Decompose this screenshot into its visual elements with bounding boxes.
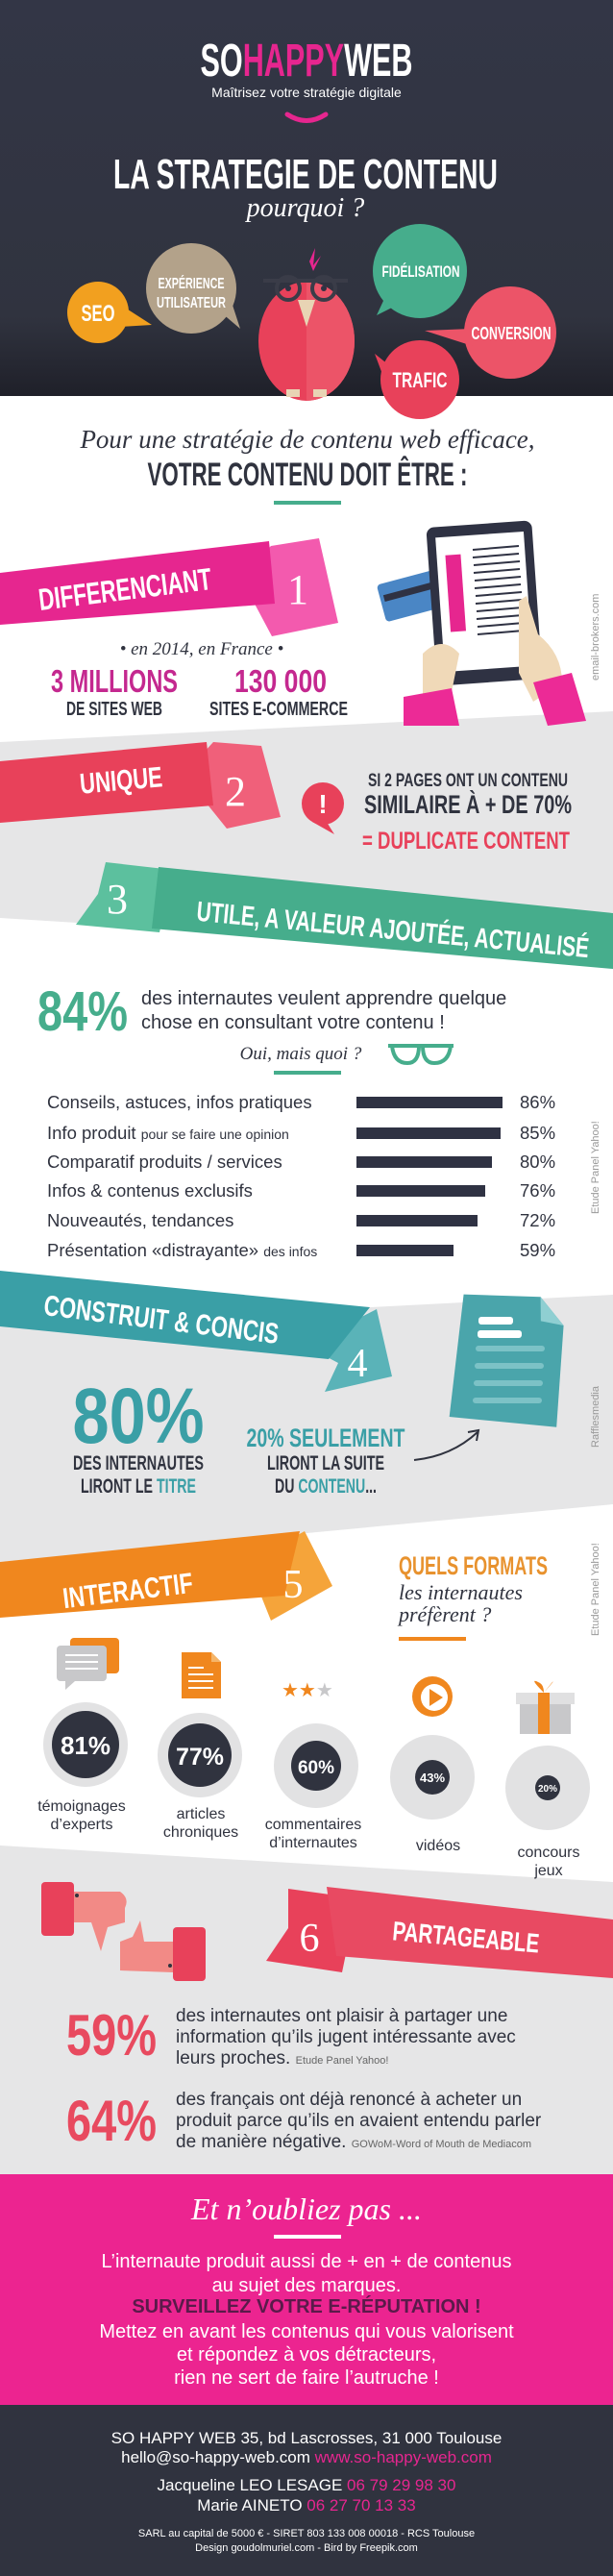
stats: sites web: 3 MILLIONS: [51, 663, 178, 699]
ribbon 1: differenciant: DIFFERENCIANT: [37, 561, 213, 617]
panel: et n'oubliez pas: L’internaute produit aussi de + en + de contenus: [102, 2251, 511, 2272]
bubble: SEO: [67, 282, 152, 343]
title: [113, 151, 498, 223]
chart: format circles: témoignages: [37, 1798, 126, 1815]
bubble: trafic: [375, 340, 459, 419]
footer: SARL au capital de 5000 € - SIRET 803 133 008 00018 - RCS Toulouse: [138, 2528, 475, 2539]
ribbon 1: differenciant: 1: [287, 566, 308, 613]
panel: et n'oubliez pas: Mettez en avant les contenus qui vous valorisent: [99, 2321, 514, 2342]
ribbon 6: partageable: 6: [300, 1917, 319, 1961]
chart: format circles: 60%: [298, 1758, 334, 1778]
bubble: experience utilisateur: EXPÉRIENCE: [158, 274, 225, 292]
bubble: fidelisation: [373, 224, 467, 318]
stat: 59%: [66, 2003, 516, 2068]
stat: 80% titre: DES INTERNAUTES: [73, 1452, 204, 1474]
bar chart: [47, 1092, 555, 1260]
icon: speech bubbles: [57, 1638, 119, 1690]
ribbon 1: differenciant: [0, 538, 338, 636]
bar chart: Info produit pour se faire une opinion: [47, 1123, 289, 1143]
bar chart: 59%: [520, 1240, 555, 1260]
footer: SO HAPPY WEB 35, bd Lascrosses, 31 000 Toulouse: [111, 2429, 502, 2447]
ribbon 2: unique: UNIQUE: [79, 761, 163, 801]
icon: stars: ★★★: [282, 1678, 333, 1701]
stat: 64%: 64%: [66, 2089, 157, 2153]
icon: thumbs: [41, 1882, 206, 1981]
ribbon 5: interactif: INTERACTIF: [61, 1568, 195, 1615]
panel: et n'oubliez pas: et répondez à vos détracteurs,: [177, 2344, 436, 2365]
ribbon 5: interactif: 5: [282, 1563, 304, 1607]
panel: et n'oubliez pas: SURVEILLEZ VOTRE E-RÉPUTATION !: [132, 2295, 481, 2317]
chart: format circles: chroniques: [163, 1824, 238, 1841]
stat: 59%: information qu’ils jugent intéressante avec: [176, 2027, 516, 2047]
subtitle: Pour une stratégie de contenu web efficace,: [79, 425, 535, 454]
chart: format circles: 20%: [538, 1784, 557, 1795]
bubble: trafic: TRAFIC: [392, 368, 448, 392]
callout: duplicate content: [302, 771, 572, 855]
arrow: [414, 1430, 478, 1460]
stat: 64%: de manière négative. GOWoM-Word of Mouth de Mediacom: [176, 2132, 531, 2152]
ribbon 4: construit & concis: CONSTRUIT & CONCIS: [42, 1290, 281, 1350]
stats: sites web: 130 000: [234, 663, 327, 699]
chart: format circles: commentaires: [265, 1817, 361, 1833]
bubble: conversion: CONVERSION: [471, 324, 552, 343]
stats: sites web: [51, 639, 348, 720]
stat: 20% contenu: DU CONTENU...: [275, 1475, 377, 1498]
bubble: experience utilisateur: [146, 243, 240, 334]
bar chart: Présentation «distrayante» des infos: [47, 1240, 317, 1260]
heading: quels formats: les internautes: [399, 1580, 523, 1604]
footer: Marie AINETO 06 27 70 13 33: [197, 2496, 416, 2514]
panel: et n'oubliez pas: [0, 2174, 613, 2405]
bar chart: Nouveautés, tendances: [47, 1210, 233, 1230]
ribbon 6: partageable: PARTAGEABLE: [391, 1916, 541, 1959]
ribbon 4: construit & concis: [0, 1271, 392, 1392]
bar chart: 72%: [520, 1210, 555, 1230]
bar chart: 85%: [520, 1123, 555, 1143]
heading: oui mais quoi: [240, 1044, 454, 1075]
panel: et n'oubliez pas: Et n’oubliez pas ...: [190, 2192, 422, 2226]
stat: 80% titre: 80%: [73, 1373, 204, 1460]
bar chart: 80%: [520, 1152, 555, 1172]
chart: format circles: 81%: [61, 1731, 110, 1760]
stat: 20% contenu: [246, 1424, 405, 1498]
stat: 64%: des français ont déjà renoncé à acheter un: [176, 2090, 522, 2110]
bubble: conversion: [425, 286, 556, 379]
gray band 1: [0, 711, 613, 956]
stat: 80% titre: LIRONT LE TITRE: [81, 1475, 196, 1498]
source: etude panel yahoo 2: Etude Panel Yahoo!: [590, 1543, 601, 1636]
chart: format circles: vidéos: [416, 1838, 460, 1854]
stats: sites web: DE SITES WEB: [66, 699, 162, 720]
bar chart: 76%: [520, 1180, 555, 1201]
stat: 20% contenu: LIRONT LA SUITE: [267, 1452, 384, 1474]
source: rafflesmedia: Rafflesmedia: [590, 1385, 601, 1448]
bubble: experience utilisateur: UTILISATEUR: [157, 295, 226, 311]
bubble: SEO: SEO: [81, 301, 115, 327]
panel: et n'oubliez pas: au sujet des marques.: [212, 2275, 401, 2296]
stats: sites web: SITES E-COMMERCE: [209, 699, 348, 720]
logo: Maîtrisez votre stratégie digitale: [211, 85, 402, 100]
ribbon 2: unique: [0, 742, 281, 829]
stat: 80% titre: [73, 1373, 204, 1498]
chart: format circles: d’experts: [51, 1817, 112, 1833]
icon: play: [412, 1676, 453, 1717]
ribbon 2: unique: 2: [225, 768, 246, 815]
chart: format circles: [37, 1702, 590, 1879]
gray band 3: [0, 1845, 613, 2174]
stat: 84%: [37, 980, 506, 1043]
stat: 59%: des internautes ont plaisir à partager une: [176, 2006, 507, 2026]
stat: 64%: produit parce qu’ils en avaient entendu parler: [176, 2111, 542, 2131]
stat: 84%: 84%: [37, 980, 128, 1043]
callout: duplicate content: !: [318, 789, 328, 819]
chart: format circles: concours: [518, 1845, 579, 1861]
bar chart: Infos & contenus exclusifs: [47, 1180, 253, 1201]
source: etude panel yahoo 1: Etude Panel Yahoo!: [590, 1121, 601, 1214]
chart: format circles: 77%: [176, 1744, 224, 1771]
ribbon 4: construit & concis: 4: [348, 1342, 367, 1386]
footer: [0, 2405, 613, 2576]
stat: 59%: 59%: [66, 2003, 157, 2068]
heading: quels formats: [397, 1551, 548, 1641]
chart: format circles: articles: [177, 1806, 225, 1822]
bubble: fidelisation: FIDÉLISATION: [382, 262, 459, 281]
chart: format circles: d’internautes: [269, 1835, 357, 1851]
icon: parrot: [258, 248, 355, 401]
stat: 20% contenu: 20% SEULEMENT: [246, 1424, 405, 1452]
chart: format circles: jeux: [533, 1863, 563, 1879]
header background: [0, 0, 613, 396]
heading: oui mais quoi: Oui, mais quoi ?: [240, 1044, 362, 1064]
icon: document: [449, 1291, 566, 1427]
stat: 64%: [66, 2089, 542, 2153]
ribbon 6: partageable: [266, 1887, 613, 1978]
stat: 84%: des internautes veulent apprendre quelque: [141, 988, 506, 1009]
bar chart: Comparatif produits / services: [47, 1152, 282, 1172]
stat: 84%: chose en consultant votre contenu !: [141, 1012, 445, 1033]
icon: article: [182, 1652, 221, 1698]
bar chart: 86%: [520, 1092, 555, 1112]
icon: gift: [516, 1681, 575, 1734]
bar chart: Conseils, astuces, infos pratiques: [47, 1092, 312, 1112]
ribbon 5: interactif: [0, 1531, 332, 1621]
stats: sites web: • en 2014, en France •: [120, 639, 283, 659]
footer: hello@so-happy-web.com www.so-happy-web.com: [121, 2448, 492, 2466]
logo: [200, 36, 413, 121]
ribbon 3: utile: 3: [107, 876, 128, 923]
source: email-brokers: email-brokers.com: [590, 594, 601, 681]
subtitle: [79, 425, 535, 505]
heading: quels formats: préfèrent ?: [397, 1602, 491, 1626]
title: pourquoi ?: [245, 193, 364, 223]
logo: SOHAPPYWEB: [200, 36, 413, 87]
stat: 59%: leurs proches. Etude Panel Yahoo!: [176, 2048, 388, 2068]
chart: format circles: 43%: [420, 1771, 445, 1785]
ribbon 3: utile: [76, 862, 613, 969]
panel: et n'oubliez pas: rien ne sert de faire l’autruche !: [174, 2367, 439, 2389]
footer: Jacqueline LEO LESAGE 06 79 29 98 30: [158, 2476, 455, 2494]
footer: Design goudolmuriel.com - Bird by Freepik.com: [195, 2542, 418, 2554]
gray band 2: [0, 1295, 613, 1562]
icon: tablet with hands: [377, 520, 586, 726]
